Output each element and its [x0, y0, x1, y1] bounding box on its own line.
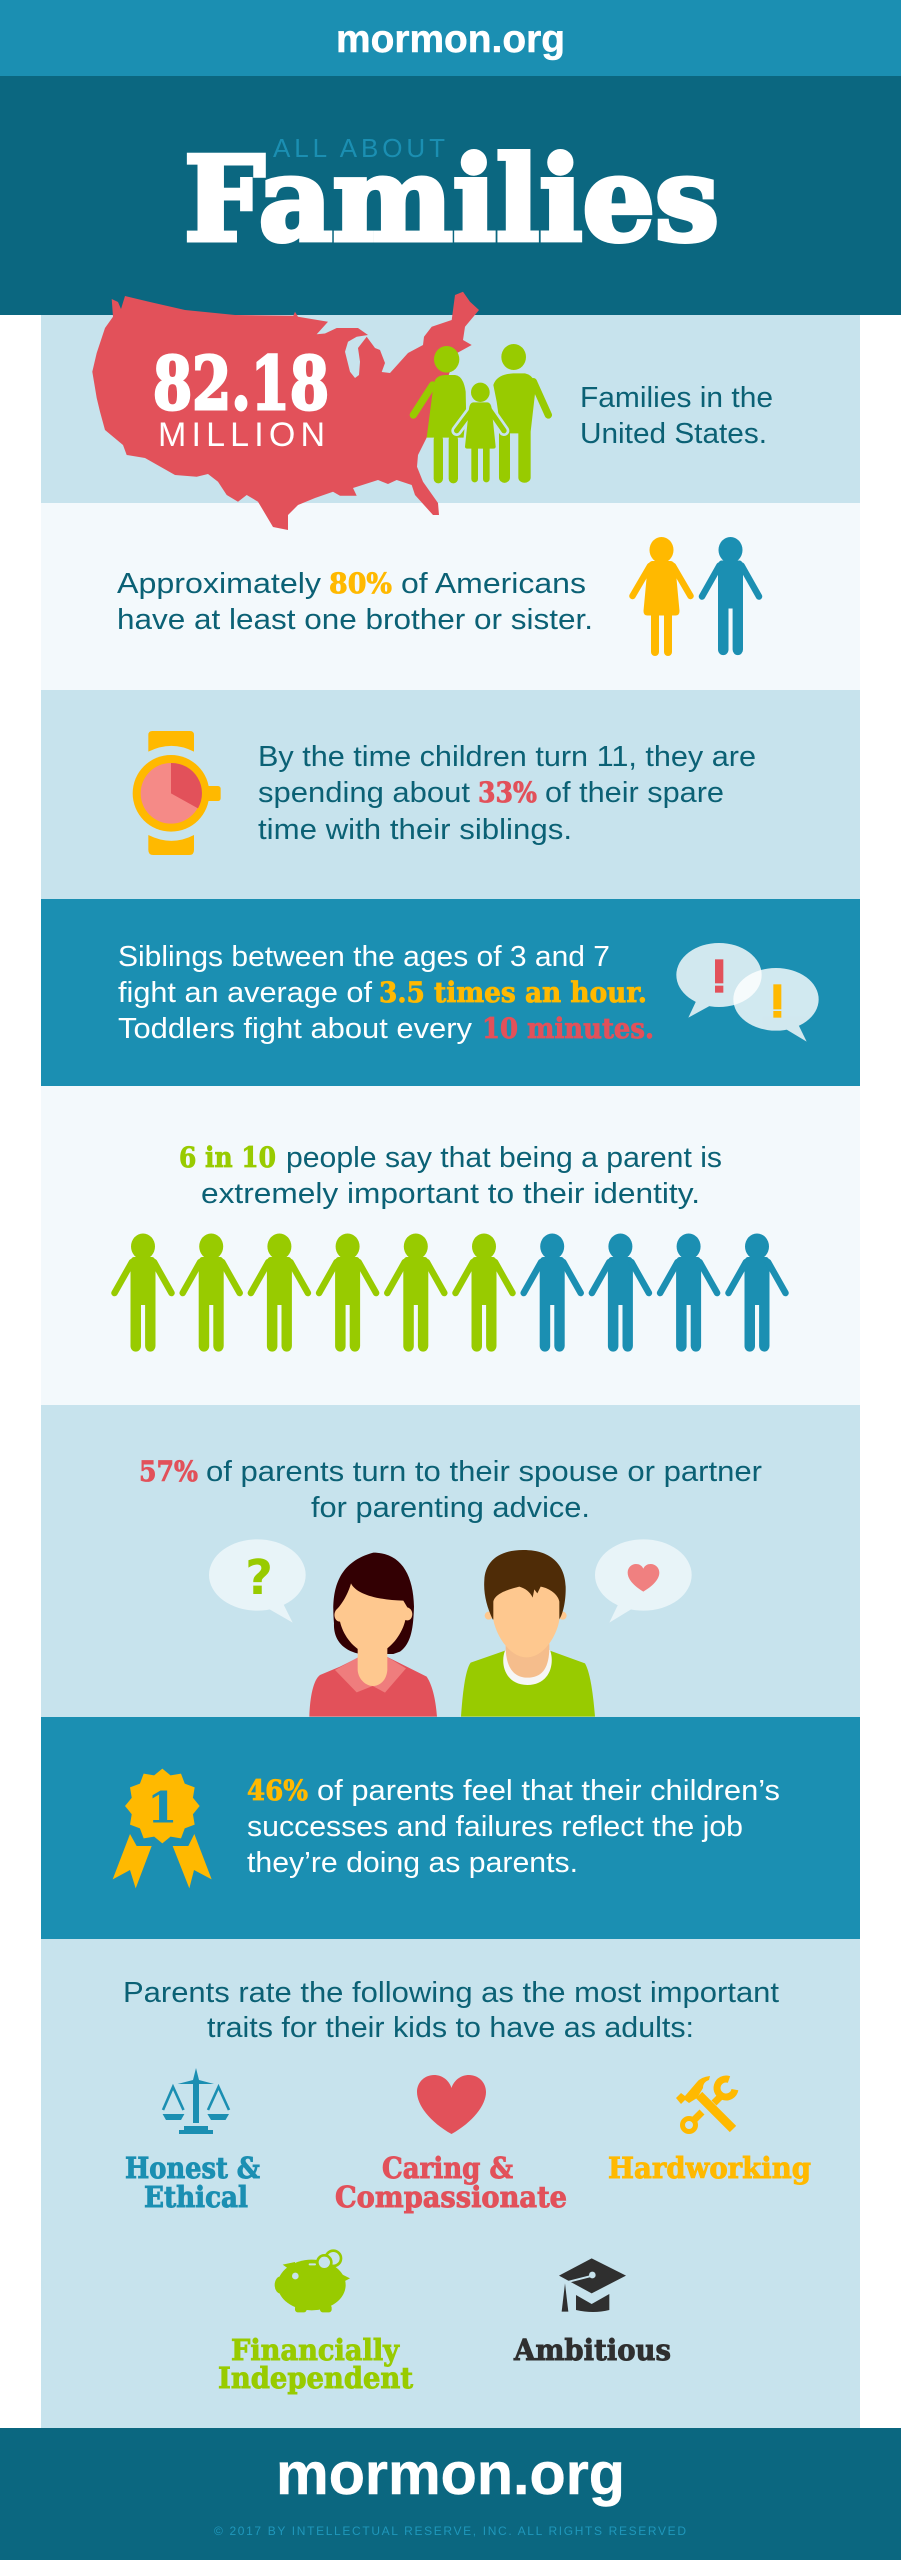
panel: important traits [41, 1939, 860, 2428]
pictogram: 4 of 10 people blue [524, 1234, 786, 1352]
text: families in the United States: Families in the [580, 382, 773, 414]
panel: children's successes [41, 1717, 860, 1939]
text: 46% of parents: 46% [247, 1774, 308, 1807]
trait: ambitious [513, 2258, 671, 2367]
icon: speech bubbles with exclamation marks [676, 943, 819, 1042]
label: financially independent: Financially [231, 2333, 400, 2367]
icon: hammer and wrench [676, 2076, 735, 2132]
text: 57% of parents: 57% [139, 1455, 198, 1488]
icon: award ribbon [113, 1769, 212, 1888]
text: 46% of parents: of parents feel that their children’s [317, 1775, 780, 1807]
text: fights per hour [118, 941, 654, 1045]
footer logo: mormon.org: mormon.org [276, 2441, 625, 2507]
icon: sister figure [632, 537, 690, 656]
label: financially independent [218, 2333, 414, 2395]
label: financially independent: Independent [218, 2361, 414, 2395]
label: honest and ethical: Ethical [144, 2180, 248, 2214]
text: 57% of parents [139, 1455, 762, 1524]
heading: parents rate traits [123, 1977, 779, 2044]
text: families in the United States: United States. [580, 418, 767, 450]
panel: parenting advice [41, 1405, 860, 1717]
icon: heart [417, 2075, 486, 2134]
title: families: Families [184, 132, 719, 268]
icon: heart speech bubble [595, 1539, 692, 1623]
panel: sibling fights [41, 899, 860, 1086]
trait: caring and compassionate [335, 2075, 567, 2214]
label: caring and compassionate: Caring & [382, 2151, 513, 2185]
text: 6 in 10: people say that being a parent is [286, 1142, 722, 1174]
icon: scales of justice [163, 2068, 229, 2134]
icon: piggy bank [275, 2251, 350, 2312]
copyright: © 2017 BY INTELLECTUAL RESERVE, INC. ALL RIGHTS RESERVED [214, 2524, 686, 2538]
text: fights per hour: 3.5 times an hour. [379, 976, 647, 1009]
label: honest and ethical: Honest & [125, 2151, 260, 2185]
top band: mormon.org [0, 0, 901, 76]
text: 46% of parents: successes and failures reflect the job [247, 1811, 743, 1843]
text: 57% of parents: of parents turn to their spouse or partner [206, 1456, 762, 1488]
illustration: woman [309, 1553, 437, 1717]
text: 6 in 10: extremely important to their identity. [201, 1178, 700, 1210]
heading: parents rate traits: traits for their kids to have as adults: [207, 2012, 694, 2044]
icon: question speech bubble: ? [245, 1550, 273, 1606]
stat: 82.18: 82.18 [153, 341, 329, 427]
panel: 6 in 10 parents [41, 1086, 860, 1405]
label: honest and ethical [125, 2151, 260, 2214]
panel: families in the US [41, 292, 860, 530]
trait: hardworking [608, 2076, 811, 2185]
label: hardworking: Hardworking [608, 2151, 811, 2185]
text: 33% of spare time: of their spare [545, 777, 724, 809]
text: fights per hour: fight an average of [118, 977, 373, 1009]
text: 80% of Americans: have at least one brother or sister. [117, 604, 593, 636]
icon: question speech bubble [209, 1539, 306, 1623]
text: 80% of Americans [117, 567, 593, 636]
text: fights per hour: Siblings between the ages of 3 and 7 [118, 941, 610, 973]
text: 33% of spare time: time with their siblings. [258, 814, 572, 846]
text: 33% of spare time [258, 741, 756, 846]
top band: mormon.org: mormon.org [336, 18, 565, 61]
trait: financially independent [218, 2251, 414, 2395]
icon: graduation cap [559, 2258, 626, 2312]
text: 33% of spare time: 33% [478, 776, 537, 809]
label: caring and compassionate [335, 2151, 567, 2214]
heading: parents rate traits: Parents rate the following as the most important [123, 1977, 779, 2009]
icon: family figures [413, 344, 548, 485]
text: 33% of spare time: spending about [258, 777, 470, 809]
text: 80% of Americans: 80% [329, 567, 392, 600]
footer [0, 2428, 901, 2560]
text: families in the United States [580, 382, 773, 450]
panel: siblings 80% [41, 503, 860, 690]
text: 80% of Americans: Approximately [117, 568, 322, 600]
text: fights per hour: 10 minutes. [482, 1012, 654, 1045]
illustration: man [461, 1550, 595, 1717]
map of the United States [92, 292, 479, 530]
icon: award ribbon: 1 [147, 1783, 177, 1834]
text: 6 in 10 [179, 1141, 722, 1210]
text: 46% of parents [247, 1774, 780, 1879]
title header [0, 76, 901, 315]
text: 46% of parents: they’re doing as parents. [247, 1847, 578, 1879]
subtitle: all about: ALL ABOUT [273, 133, 445, 163]
trait: honest and ethical [125, 2068, 260, 2214]
label: ambitious: Ambitious [513, 2333, 671, 2367]
text: 6 in 10: 6 in 10 [179, 1141, 276, 1174]
text: 33% of spare time: By the time children turn 11, they are [258, 741, 756, 773]
icon: watch [133, 731, 221, 855]
icon: brother figure [702, 537, 759, 655]
text: fights per hour: Toddlers fight about every [118, 1013, 473, 1045]
text: 57% of parents: for parenting advice. [311, 1492, 590, 1524]
panel: spare time with siblings [41, 690, 860, 899]
stat unit: million: MILLION [158, 416, 325, 454]
text: 80% of Americans: of Americans [401, 568, 586, 600]
label: caring and compassionate: Compassionate [335, 2180, 567, 2214]
pictogram: 6 of 10 people green [114, 1234, 512, 1352]
